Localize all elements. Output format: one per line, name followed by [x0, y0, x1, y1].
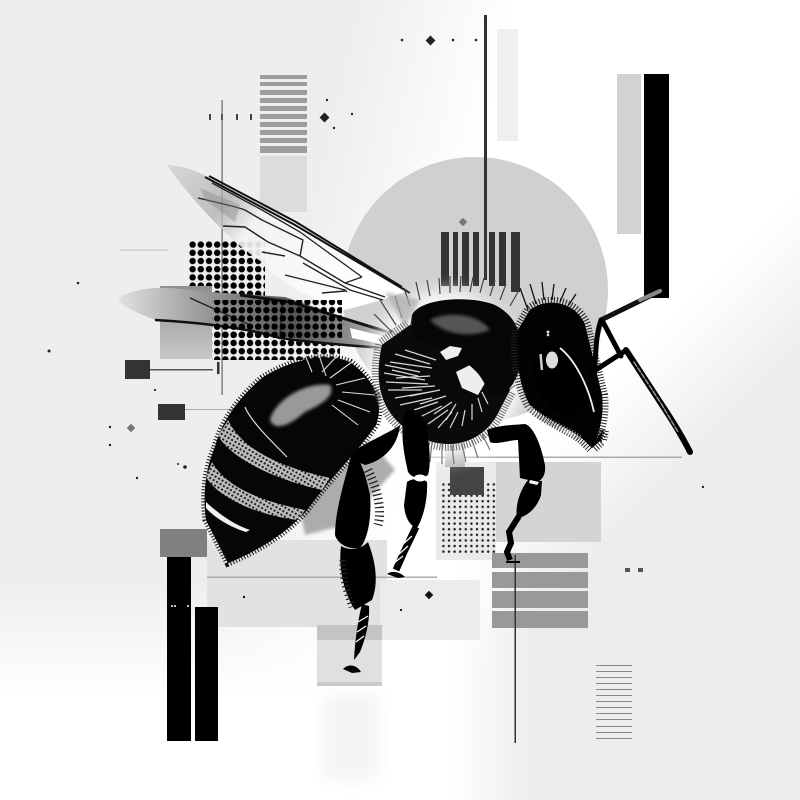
- stacked grey stripes: [492, 553, 588, 628]
- small labelled rectangle with leader 1: [125, 360, 220, 379]
- square below hind leg: [317, 625, 382, 686]
- abdomen bands: [218, 420, 330, 490]
- lower fur fringe: [392, 425, 490, 464]
- pale grey square under stripes: [260, 156, 307, 212]
- top right bars: [617, 74, 669, 298]
- white tuft: [456, 360, 488, 395]
- small dot grid: [441, 482, 498, 554]
- upper fur fringe: [374, 276, 518, 332]
- central pale panel: [436, 462, 496, 560]
- bee shadow: [300, 440, 395, 535]
- diamond and dots on panel: [243, 591, 433, 611]
- wing base joint: [440, 346, 462, 360]
- tall black bars: [167, 557, 218, 741]
- crown hairs: [520, 282, 576, 310]
- shoulder tuft: [385, 292, 420, 328]
- large grey circle: [342, 157, 608, 423]
- striped block top: [260, 75, 307, 153]
- two small squares: [625, 568, 643, 572]
- dark square: [450, 467, 484, 495]
- lower wing: [118, 288, 440, 352]
- light vertical panel: [497, 29, 518, 141]
- white panel behind antenna: [608, 234, 644, 304]
- vertical rule lower: [514, 555, 516, 743]
- vertical black rule: [484, 15, 487, 280]
- fur streaks: [384, 350, 488, 428]
- abdomen highlight: [270, 385, 331, 426]
- small labelled rectangle with leader 2: [158, 404, 240, 420]
- abdomen fur: [305, 352, 375, 425]
- thin ruled block lower right: [596, 665, 632, 739]
- bee white halo: [367, 290, 523, 460]
- thorax shield: [411, 299, 522, 395]
- cheek hair: [530, 408, 580, 438]
- tick row and thin vertical line: [209, 100, 252, 395]
- front leg: [487, 424, 545, 562]
- hind leg: [335, 425, 400, 673]
- horizontal thin rule: [430, 456, 682, 458]
- top scattered diamonds and dots: [320, 36, 477, 129]
- abdomen: [205, 352, 379, 563]
- thorax fur: [374, 276, 518, 464]
- lower left grey panel: [207, 540, 480, 640]
- grey diamond: [459, 218, 467, 226]
- bee: [205, 276, 690, 673]
- faint line left: [120, 250, 168, 251]
- eye rim arc: [560, 348, 594, 412]
- ocelli: [546, 330, 550, 334]
- grey stub block: [445, 440, 465, 467]
- halftone dot grids: [189, 241, 340, 360]
- barcode stripes: [441, 232, 520, 292]
- right panel under front leg: [487, 462, 601, 542]
- dark grey header block: [160, 529, 207, 557]
- upper wing: [167, 165, 410, 310]
- grey block behind lower wing: [160, 286, 212, 359]
- eye highlight: [546, 352, 558, 368]
- compound eye: [522, 335, 598, 425]
- head: [517, 282, 603, 448]
- middle leg: [387, 409, 430, 578]
- antennae: [591, 291, 690, 452]
- scattered dots left: [48, 282, 704, 488]
